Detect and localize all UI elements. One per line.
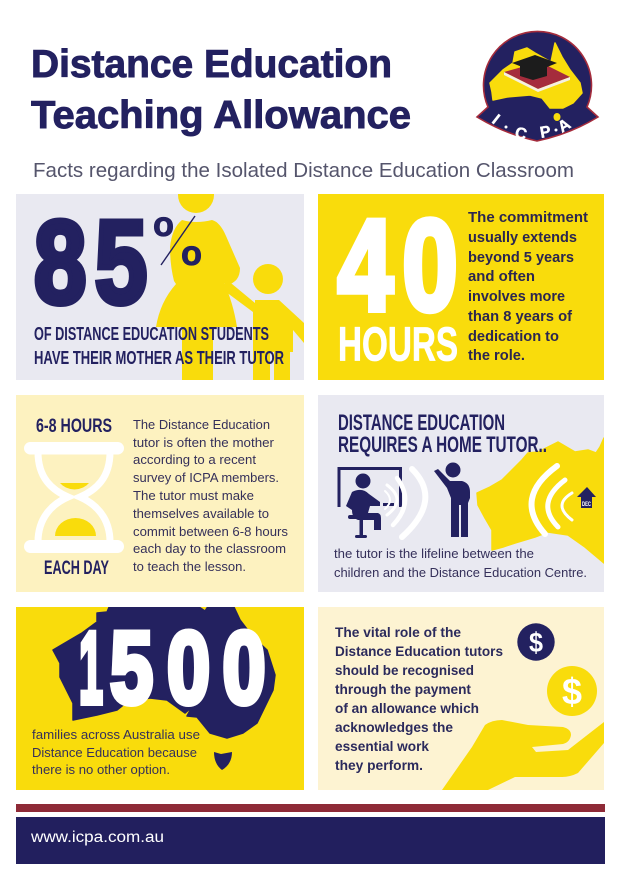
icon: DEC house: DEC <box>582 502 591 508</box>
allowance text <box>335 624 503 773</box>
footer <box>16 817 605 864</box>
lifeline text: children and the Distance Education Centre. <box>334 565 587 580</box>
tutor description: The tutor must make <box>133 488 254 503</box>
icon: ICPA logo: C <box>513 124 529 144</box>
commitment text: involves more <box>468 288 565 305</box>
panel: 85 percent <box>16 177 304 380</box>
commitment text <box>468 209 588 364</box>
allowance text: essential work <box>335 738 429 754</box>
commitment text: than 8 years of <box>468 308 573 325</box>
tutor description: The Distance Education <box>133 417 270 432</box>
footer: www.icpa.com.au <box>30 829 164 846</box>
panel: 1500 families <box>16 605 304 790</box>
big number 40: 40 <box>338 192 458 338</box>
icon: yellow coin: $ <box>562 671 582 712</box>
heading <box>338 410 547 457</box>
label: each day: EACH DAY <box>44 558 109 579</box>
percent sign: o <box>153 205 174 244</box>
commitment text: beyond 5 years <box>468 249 574 266</box>
allowance text: Distance Education tutors <box>335 643 503 659</box>
commitment text: dedication to <box>468 328 559 345</box>
icon: seated tutor at screen <box>339 468 400 538</box>
icon: hourglass <box>24 442 124 553</box>
commitment text: and often <box>468 268 535 285</box>
allowance text: The vital role of the <box>335 624 461 640</box>
footer stripe <box>16 804 605 812</box>
lifeline text <box>334 546 587 580</box>
allowance text: should be recognised <box>335 662 474 678</box>
title: Distance Education <box>31 43 392 86</box>
big number 85: 85 <box>34 196 147 328</box>
caption: HAVE THEIR MOTHER AS THEIR TUTOR <box>34 347 284 368</box>
hours label: HOURS <box>338 318 458 372</box>
tutor description: to teach the lesson. <box>133 559 246 574</box>
icon: signal waves left <box>385 469 425 537</box>
commitment text: usually extends <box>468 229 577 246</box>
map: Australia <box>477 438 610 563</box>
icon: yellow coin <box>547 666 597 716</box>
tutor description: survey of ICPA members. <box>133 470 279 485</box>
tutor description: themselves available to <box>133 506 269 521</box>
commitment text: The commitment <box>468 209 588 226</box>
panel: allowance <box>318 607 604 790</box>
heading: DISTANCE EDUCATION <box>338 410 505 435</box>
icon: ICPA logo: I <box>489 112 503 128</box>
percent sign: o <box>181 234 202 273</box>
subtitle: Facts regarding the Isolated Distance Education Classroom <box>33 159 574 182</box>
allowance text: acknowledges the <box>335 719 453 735</box>
icon: ICPA logo <box>477 31 598 144</box>
tutor description <box>133 417 288 574</box>
icon: hand <box>442 720 604 790</box>
families text: there is no other option. <box>32 762 170 777</box>
big number 1500: 500 <box>110 612 266 726</box>
commitment text: the role. <box>468 347 525 364</box>
tutor description: tutor is often the mother <box>133 435 275 450</box>
icon: ICPA logo: P <box>539 123 553 142</box>
panel: 40 hours <box>318 192 604 380</box>
percent sign <box>153 205 202 273</box>
tutor description: according to a recent <box>133 452 256 467</box>
icon: ICPA logo: A <box>555 116 574 136</box>
title <box>31 43 411 137</box>
icon: standing teacher <box>434 462 470 537</box>
title: Teaching Allowance <box>31 94 411 137</box>
caption <box>34 323 284 368</box>
heading: 6-8 hours: 6-8 HOURS <box>36 416 112 437</box>
icon: mother and child <box>156 177 304 380</box>
map: Australia navy <box>53 605 275 738</box>
panel: 6-8 hours <box>16 395 304 592</box>
icon: navy coin: $ <box>529 627 543 658</box>
allowance text: through the payment <box>335 681 471 697</box>
icon: DEC house <box>577 487 596 508</box>
allowance text: they perform. <box>335 757 423 773</box>
tutor description: each day to the classroom <box>133 541 286 556</box>
families text: families across Australia use <box>32 727 200 742</box>
families text: Distance Education because <box>32 745 197 760</box>
families text <box>32 727 200 777</box>
big number 1500: 1 <box>79 611 103 725</box>
allowance text: of an allowance which <box>335 700 479 716</box>
lifeline text: the tutor is the lifeline between the <box>334 546 534 561</box>
icon: Tasmania <box>214 752 232 770</box>
icon: signal waves right <box>532 466 572 534</box>
caption: OF DISTANCE EDUCATION STUDENTS <box>34 323 269 344</box>
tutor description: commit between 6-8 hours <box>133 524 288 539</box>
panel: home tutor <box>318 395 610 592</box>
icon: navy coin <box>517 623 555 661</box>
